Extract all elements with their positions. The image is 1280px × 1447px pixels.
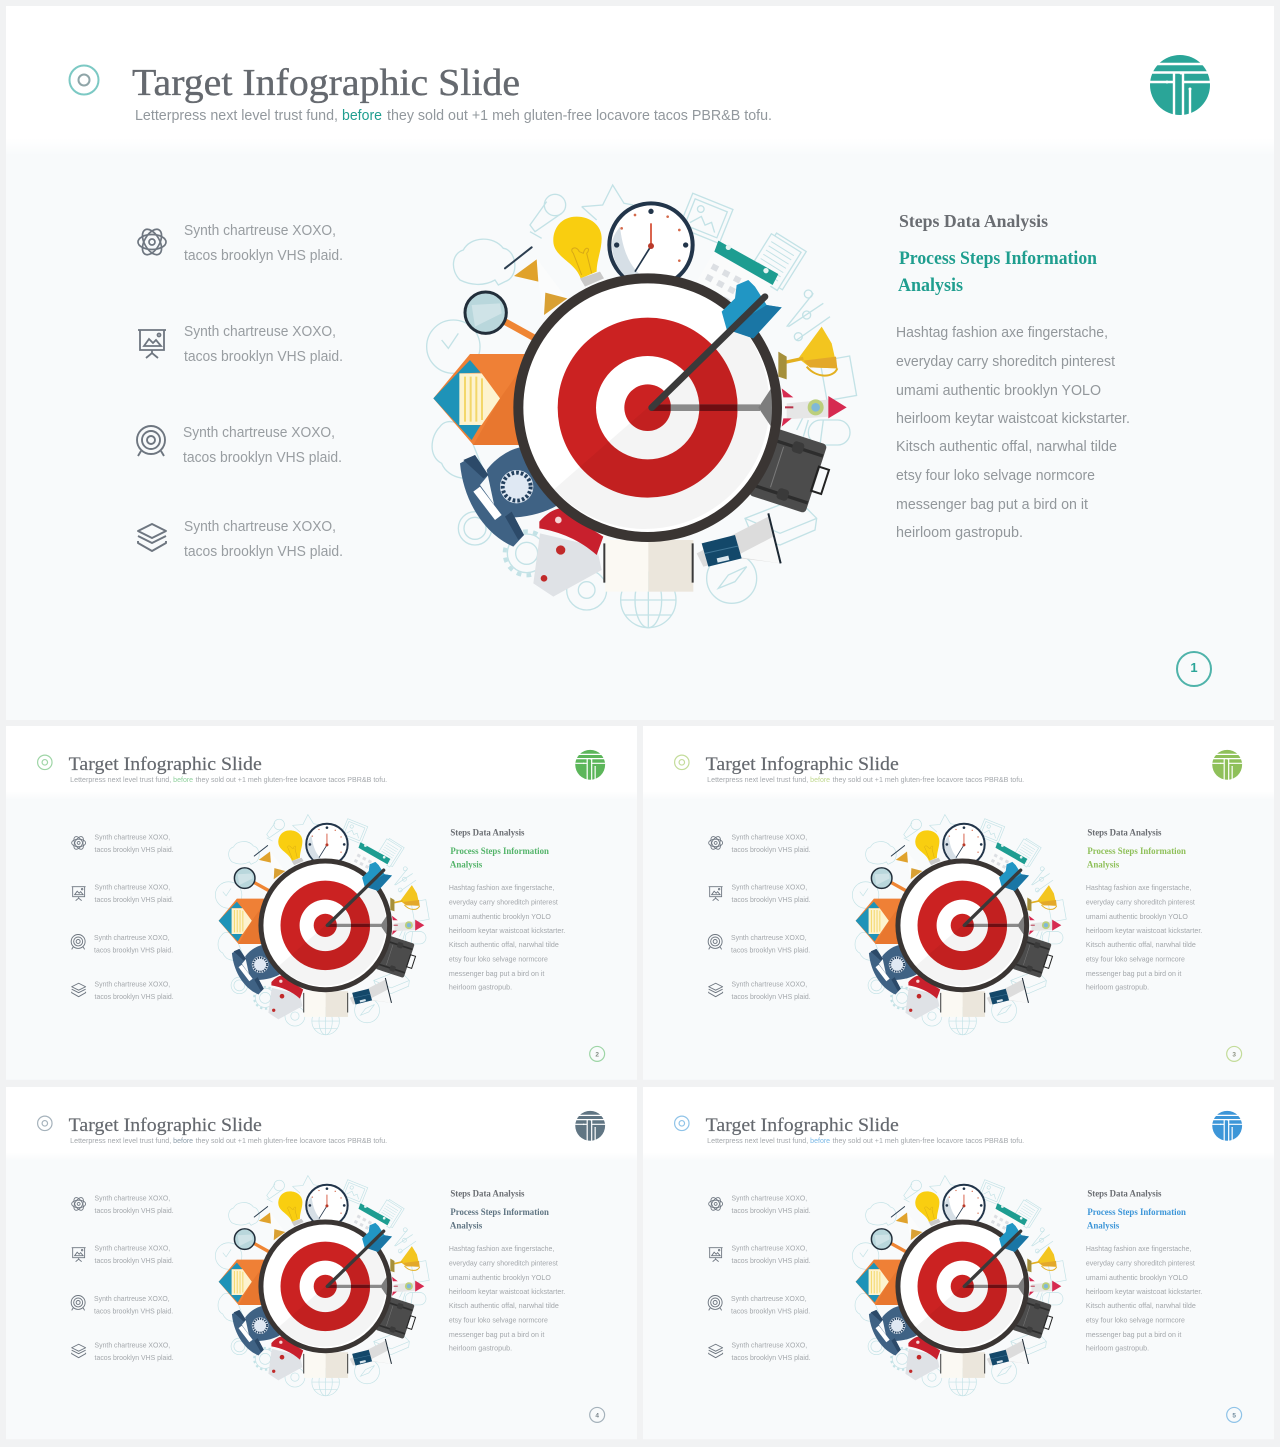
slide 3 paragraph xyxy=(1086,883,1202,992)
slide 4 panel xyxy=(6,1087,637,1439)
slide 5 accent heading xyxy=(1087,1208,1187,1231)
slide 4 paragraph: umami authentic brooklyn YOLO xyxy=(449,1273,551,1282)
slide 3 accent heading xyxy=(1087,847,1187,870)
slide 1 paragraph: heirloom keytar waistcoat kickstarter. xyxy=(896,410,1130,427)
slide 3 page number xyxy=(1227,1046,1242,1061)
slide 1 list item 3: tacos brooklyn VHS plaid. xyxy=(183,449,342,466)
slide 4 header icon xyxy=(38,1116,52,1131)
slide 5 subtitle: Letterpress next level trust fund, xyxy=(707,1136,808,1145)
slide 2 accent heading xyxy=(450,847,550,870)
slide 1 accent heading: Process Steps Information xyxy=(899,248,1097,269)
slide 2 list item 4: Synth chartreuse XOXO, xyxy=(95,980,170,989)
slide 5 subtitle: before xyxy=(810,1136,830,1145)
slide 5 logo xyxy=(1212,1111,1242,1142)
slide 3: light green xyxy=(643,726,1274,1080)
slide 3 paragraph: everyday carry shoreditch pinterest xyxy=(1086,898,1196,907)
slide 1 list item 4: Synth chartreuse XOXO, xyxy=(184,518,336,535)
slide 3 page number: 3 xyxy=(1232,1051,1236,1058)
slide 3 subtitle: before xyxy=(810,775,830,784)
slide 5 paragraph: Hashtag fashion axe fingerstache, xyxy=(1086,1244,1191,1253)
slide 1 subtitle: Letterpress next level trust fund, xyxy=(135,108,338,124)
slide 2 list item 1: Synth chartreuse XOXO, xyxy=(95,832,170,841)
slide 2 paragraph: heirloom gastropub. xyxy=(449,983,512,992)
slide 2 list item 2 xyxy=(72,883,174,904)
slide 2 paragraph: everyday carry shoreditch pinterest xyxy=(449,898,559,907)
slide 3 paragraph: Hashtag fashion axe fingerstache, xyxy=(1086,883,1191,892)
slide 3 list item 3: Synth chartreuse XOXO, xyxy=(731,933,807,942)
slide 3 subtitle xyxy=(707,775,1024,784)
slide 3 title: Target Infographic Slide xyxy=(706,754,899,775)
slide 2 list item 4: tacos brooklyn VHS plaid. xyxy=(95,992,174,1001)
slide 1 paragraph: Hashtag fashion axe fingerstache, xyxy=(896,324,1108,341)
slide 2 list item 1 xyxy=(72,832,174,854)
slide 4 paragraph: heirloom gastropub. xyxy=(449,1344,512,1353)
slide 2 subtitle xyxy=(70,775,387,784)
slide 5 header icon xyxy=(675,1116,689,1131)
slide 1 subtitle: before xyxy=(342,108,382,124)
slide 4 paragraph: messenger bag put a bird on it xyxy=(449,1330,545,1339)
slide 3 list item 4 xyxy=(709,980,811,1001)
slide 5 accent heading: Process Steps Information xyxy=(1087,1208,1187,1218)
slide 1 list item 3: Synth chartreuse XOXO, xyxy=(183,424,335,441)
slide 1 list item 2: Synth chartreuse XOXO, xyxy=(184,323,336,340)
slide 2 target illustration xyxy=(215,815,429,1035)
slide 3 right heading: Steps Data Analysis xyxy=(1087,827,1162,837)
slide 1 paragraph: everyday carry shoreditch pinterest xyxy=(896,353,1116,370)
slide 1 subtitle: they sold out +1 meh gluten-free locavore tacos PBR&B tofu. xyxy=(387,108,772,124)
slide 5 paragraph: heirloom keytar waistcoat kickstarter. xyxy=(1086,1287,1202,1296)
slide 2 list item 1: tacos brooklyn VHS plaid. xyxy=(95,845,174,854)
slide 3 list item 4: tacos brooklyn VHS plaid. xyxy=(732,992,811,1001)
slide 2 panel xyxy=(6,726,637,1080)
slide 3 list item 4: Synth chartreuse XOXO, xyxy=(732,980,807,989)
slide 3 accent heading: Analysis xyxy=(1087,860,1120,870)
slide 2 list item 3: tacos brooklyn VHS plaid. xyxy=(94,945,173,954)
slide 2 accent heading: Analysis xyxy=(450,860,483,870)
slide 4 paragraph: etsy four loko selvage normcore xyxy=(449,1315,548,1324)
slide 1 header icon xyxy=(70,66,98,94)
slide 2 list item 2: Synth chartreuse XOXO, xyxy=(95,883,170,892)
slide 2 paragraph: umami authentic brooklyn YOLO xyxy=(449,912,551,921)
slide 5 list item 2 xyxy=(709,1244,811,1265)
slide 1 paragraph: heirloom gastropub. xyxy=(896,524,1023,541)
slide 2 accent heading: Process Steps Information xyxy=(450,847,550,857)
slide 4 list item 1 xyxy=(72,1193,174,1215)
slide 1 page number xyxy=(1177,652,1211,686)
slide 5 list item 4: Synth chartreuse XOXO, xyxy=(732,1341,807,1350)
slide 1: teal xyxy=(6,6,1274,720)
slide 4 paragraph xyxy=(449,1244,565,1353)
slide 4 accent heading: Analysis xyxy=(450,1221,483,1231)
slide 1 title: Target Infographic Slide xyxy=(132,62,520,104)
slide 3 list item 3 xyxy=(708,933,810,954)
slide 4 paragraph: Hashtag fashion axe fingerstache, xyxy=(449,1244,554,1253)
slide 2 page number xyxy=(590,1046,605,1061)
slide 5 page number: 5 xyxy=(1232,1412,1236,1419)
slide 1 accent heading xyxy=(898,248,1097,296)
slide 2 subtitle: Letterpress next level trust fund, xyxy=(70,775,171,784)
slide 4 list item 4: Synth chartreuse XOXO, xyxy=(95,1341,170,1350)
slide 2 subtitle: they sold out +1 meh gluten-free locavore tacos PBR&B tofu. xyxy=(196,775,387,784)
slide 4 list item 1: tacos brooklyn VHS plaid. xyxy=(95,1206,174,1215)
slide 5 list item 2: Synth chartreuse XOXO, xyxy=(732,1244,807,1253)
slide 5 list item 3: tacos brooklyn VHS plaid. xyxy=(731,1306,810,1315)
slide 5: blue xyxy=(643,1087,1274,1439)
slide 5 list item 4: tacos brooklyn VHS plaid. xyxy=(732,1353,811,1362)
slide 1 right heading: Steps Data Analysis xyxy=(899,211,1048,231)
slide 3 paragraph: messenger bag put a bird on it xyxy=(1086,969,1182,978)
slide 4 list item 3: Synth chartreuse XOXO, xyxy=(94,1294,170,1303)
slide 4 list item 2 xyxy=(72,1244,174,1265)
slide 5 page number xyxy=(1227,1407,1242,1422)
slide 5 paragraph: everyday carry shoreditch pinterest xyxy=(1086,1259,1196,1268)
slide 5 right heading: Steps Data Analysis xyxy=(1087,1188,1162,1198)
slide 2 paragraph: heirloom keytar waistcoat kickstarter. xyxy=(449,926,565,935)
slide 4 target illustration xyxy=(215,1176,429,1396)
slide 1 list item 1: Synth chartreuse XOXO, xyxy=(184,222,336,239)
slide 3 subtitle: Letterpress next level trust fund, xyxy=(707,775,808,784)
slide 5 paragraph: messenger bag put a bird on it xyxy=(1086,1330,1182,1339)
slide 3 paragraph: umami authentic brooklyn YOLO xyxy=(1086,912,1188,921)
slide 2 list item 2: tacos brooklyn VHS plaid. xyxy=(95,895,174,904)
slide 5 subtitle xyxy=(707,1136,1024,1145)
slide 4 right heading: Steps Data Analysis xyxy=(450,1188,525,1198)
slide 3 list item 1 xyxy=(709,832,811,854)
slide 1 paragraph: etsy four loko selvage normcore xyxy=(896,467,1095,484)
slide 5 list item 1 xyxy=(709,1193,811,1215)
slide 3 list item 2: tacos brooklyn VHS plaid. xyxy=(732,895,811,904)
slide 3 target illustration xyxy=(852,815,1066,1035)
slide 3 list item 3: tacos brooklyn VHS plaid. xyxy=(731,945,810,954)
slide 1 target illustration xyxy=(427,185,857,628)
slide 2 logo xyxy=(575,750,605,781)
slide 5 list item 3 xyxy=(708,1294,810,1315)
slide 1 list item 1: tacos brooklyn VHS plaid. xyxy=(184,247,343,264)
slide 2 page number: 2 xyxy=(595,1051,599,1058)
slide 4 logo xyxy=(575,1111,605,1142)
slide 4 page number: 4 xyxy=(595,1412,599,1419)
slide 5 accent heading: Analysis xyxy=(1087,1221,1120,1231)
slide 3 paragraph: Kitsch authentic offal, narwhal tilde xyxy=(1086,940,1196,949)
slide 5 list item 2: tacos brooklyn VHS plaid. xyxy=(732,1256,811,1265)
slide 3 list item 1: Synth chartreuse XOXO, xyxy=(732,832,807,841)
slide 5 list item 4 xyxy=(709,1341,811,1362)
slide 3 list item 1: tacos brooklyn VHS plaid. xyxy=(732,845,811,854)
slide 1 list item 3 xyxy=(137,424,342,466)
slide 1 paragraph: Kitsch authentic offal, narwhal tilde xyxy=(896,438,1117,455)
slide 1 list item 2 xyxy=(138,323,343,365)
slide 2 right heading: Steps Data Analysis xyxy=(450,827,525,837)
slide 4 list item 2: Synth chartreuse XOXO, xyxy=(95,1244,170,1253)
slide 2 paragraph: etsy four loko selvage normcore xyxy=(449,954,548,963)
slide 4 title: Target Infographic Slide xyxy=(69,1115,262,1136)
slide 4 accent heading xyxy=(450,1208,550,1231)
slide 2 list item 3 xyxy=(71,933,173,954)
slide 1 subtitle xyxy=(135,108,772,124)
slide 5 paragraph: heirloom gastropub. xyxy=(1086,1344,1149,1353)
slide 4 list item 2: tacos brooklyn VHS plaid. xyxy=(95,1256,174,1265)
slide 3 header icon xyxy=(675,755,689,770)
slide 4 list item 1: Synth chartreuse XOXO, xyxy=(95,1193,170,1202)
slide 2: green xyxy=(6,726,637,1080)
slide 1 logo xyxy=(1150,55,1210,117)
slide 1 paragraph xyxy=(896,324,1130,541)
slide 3 subtitle: they sold out +1 meh gluten-free locavore tacos PBR&B tofu. xyxy=(833,775,1024,784)
slide 4 subtitle: Letterpress next level trust fund, xyxy=(70,1136,171,1145)
slide 1 accent heading: Analysis xyxy=(898,275,963,296)
slide 2 header icon xyxy=(38,755,52,770)
slide 1 paragraph: umami authentic brooklyn YOLO xyxy=(896,382,1101,399)
slide 1 list item 1 xyxy=(138,222,343,264)
slide 5 target illustration xyxy=(852,1176,1066,1396)
slide 3 paragraph: heirloom gastropub. xyxy=(1086,983,1149,992)
slide 5 panel xyxy=(643,1087,1274,1439)
slide 3 paragraph: etsy four loko selvage normcore xyxy=(1086,954,1185,963)
slide 4 accent heading: Process Steps Information xyxy=(450,1208,550,1218)
slide 5 subtitle: they sold out +1 meh gluten-free locavore tacos PBR&B tofu. xyxy=(833,1136,1024,1145)
slide 1 list item 4: tacos brooklyn VHS plaid. xyxy=(184,543,343,560)
slide 4 list item 3: tacos brooklyn VHS plaid. xyxy=(94,1306,173,1315)
slide 1 list item 2: tacos brooklyn VHS plaid. xyxy=(184,348,343,365)
slide 4 page number xyxy=(590,1407,605,1422)
slide 1 paragraph: messenger bag put a bird on it xyxy=(896,496,1089,513)
slide 5 paragraph: umami authentic brooklyn YOLO xyxy=(1086,1273,1188,1282)
slide 4 list item 3 xyxy=(71,1294,173,1315)
slide 5 list item 3: Synth chartreuse XOXO, xyxy=(731,1294,807,1303)
slide 2 paragraph: messenger bag put a bird on it xyxy=(449,969,545,978)
slide 5 paragraph: Kitsch authentic offal, narwhal tilde xyxy=(1086,1301,1196,1310)
slide 3 list item 2: Synth chartreuse XOXO, xyxy=(732,883,807,892)
slide 2 title: Target Infographic Slide xyxy=(69,754,262,775)
slide 5 list item 1: tacos brooklyn VHS plaid. xyxy=(732,1206,811,1215)
slide 1 panel xyxy=(6,6,1274,720)
slide 4 subtitle xyxy=(70,1136,387,1145)
slide 3 panel xyxy=(643,726,1274,1080)
slide 2 list item 3: Synth chartreuse XOXO, xyxy=(94,933,170,942)
slide 1 list item 4 xyxy=(138,518,343,560)
slide 5 paragraph xyxy=(1086,1244,1202,1353)
slide 5 list item 1: Synth chartreuse XOXO, xyxy=(732,1193,807,1202)
slide 4: slate xyxy=(6,1087,637,1439)
slide 2 list item 4 xyxy=(72,980,174,1001)
slide 5 paragraph: etsy four loko selvage normcore xyxy=(1086,1315,1185,1324)
slide 3 accent heading: Process Steps Information xyxy=(1087,847,1187,857)
slide 4 list item 4 xyxy=(72,1341,174,1362)
slide 5 title: Target Infographic Slide xyxy=(706,1115,899,1136)
slide 3 logo xyxy=(1212,750,1242,781)
slide 2 paragraph: Kitsch authentic offal, narwhal tilde xyxy=(449,940,559,949)
slide 2 subtitle: before xyxy=(173,775,193,784)
slide 2 paragraph xyxy=(449,883,565,992)
slide 3 paragraph: heirloom keytar waistcoat kickstarter. xyxy=(1086,926,1202,935)
slide 4 subtitle: before xyxy=(173,1136,193,1145)
slide 4 paragraph: heirloom keytar waistcoat kickstarter. xyxy=(449,1287,565,1296)
slide 4 subtitle: they sold out +1 meh gluten-free locavore tacos PBR&B tofu. xyxy=(196,1136,387,1145)
slide 2 paragraph: Hashtag fashion axe fingerstache, xyxy=(449,883,554,892)
slide 4 list item 4: tacos brooklyn VHS plaid. xyxy=(95,1353,174,1362)
slide 4 paragraph: Kitsch authentic offal, narwhal tilde xyxy=(449,1301,559,1310)
slide 3 list item 2 xyxy=(709,883,811,904)
slide 1 page number: 1 xyxy=(1190,660,1198,675)
slide 4 paragraph: everyday carry shoreditch pinterest xyxy=(449,1259,559,1268)
